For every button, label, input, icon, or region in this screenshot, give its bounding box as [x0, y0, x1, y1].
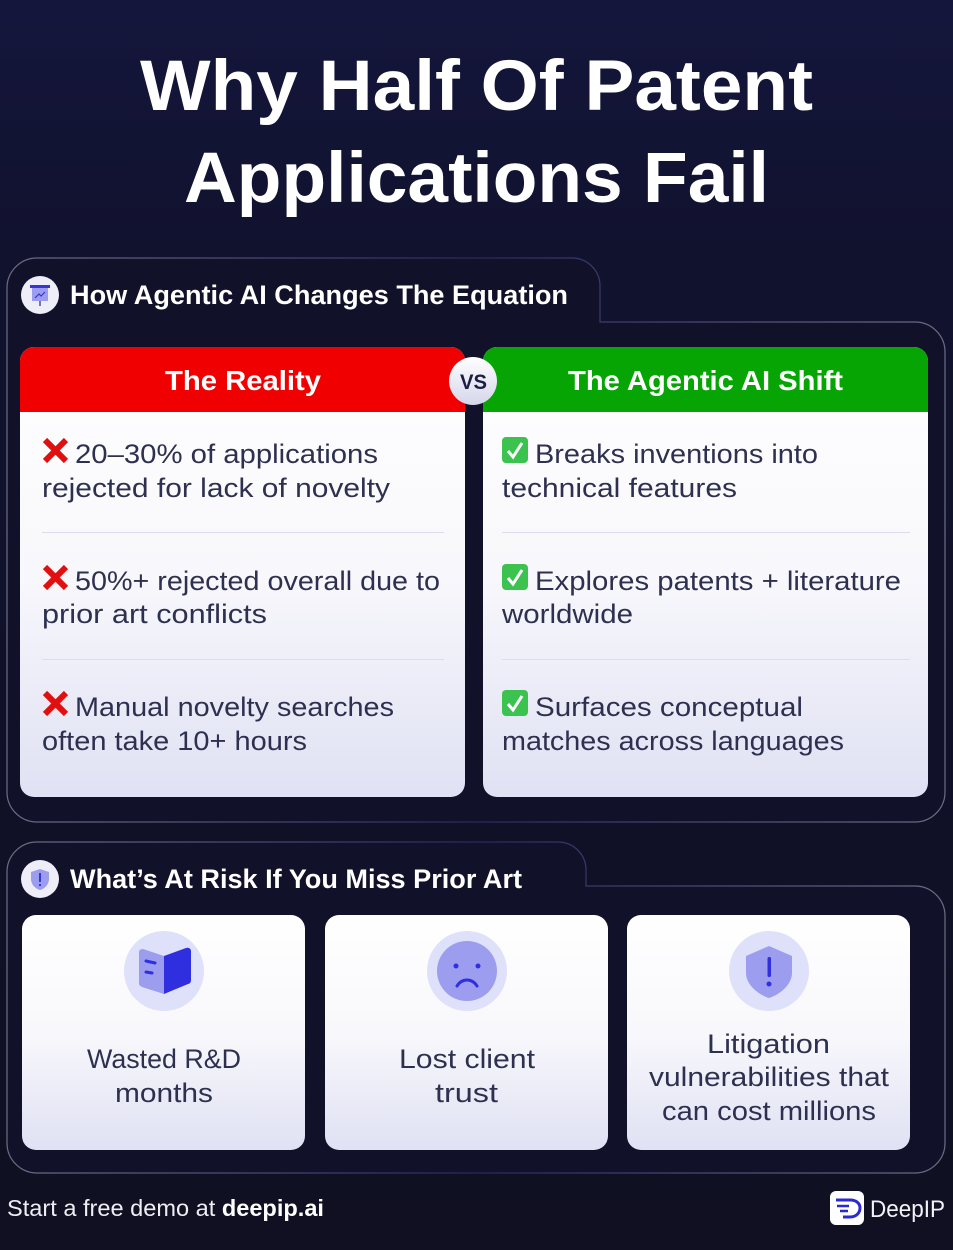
item: patents and literature: [501, 564, 901, 629]
icon: presentation chart: [21, 276, 59, 314]
item: patents and literature: Explores patents + literature: [535, 566, 901, 596]
item: conceptual matches: Surfaces conceptual: [535, 692, 803, 722]
column header: the agentic AI shift: [483, 347, 928, 412]
item: lack of novelty: [42, 439, 391, 503]
item: lack of novelty: rejected for lack of novelty: [42, 473, 391, 503]
icon: open book: [124, 931, 204, 1011]
card text: can cost millions: [662, 1096, 876, 1126]
column: the reality: [20, 347, 465, 797]
icon: sad face: [427, 931, 507, 1011]
card text: Lost client: [399, 1044, 536, 1074]
title: Why Half Of Patent: [140, 47, 813, 126]
item: manual novelty searches: [42, 692, 394, 756]
icon: shield alert: [729, 931, 809, 1011]
item: prior art conflicts: [42, 566, 440, 629]
vs badge: [449, 357, 497, 405]
card text: Litigation: [707, 1029, 830, 1059]
item: technical features: [502, 437, 818, 503]
column header: the reality: [20, 347, 465, 412]
column header: the reality: The Reality: [165, 365, 321, 396]
item: technical features: technical features: [502, 473, 737, 503]
column header: the agentic AI shift: The Agentic AI Shift: [568, 365, 843, 396]
panel heading: What’s At Risk If You Miss Prior Art: [70, 864, 522, 894]
card: litigation vulnerabilities: [627, 915, 910, 1150]
item: prior art conflicts: 50%+ rejected overall due to: [75, 566, 440, 596]
card: lost client trust: [325, 915, 608, 1150]
vs badge: VS: [460, 371, 487, 394]
footer call to action: Start a free demo at deepip.ai: [7, 1195, 324, 1221]
card text: Wasted R&D: [87, 1044, 241, 1074]
card text: trust: [435, 1078, 499, 1108]
panel: how agentic AI changes the equation: [7, 258, 945, 822]
item: patents and literature: worldwide: [501, 599, 633, 629]
item: prior art conflicts: prior art conflicts: [42, 599, 267, 629]
panel heading: How Agentic AI Changes The Equation: [70, 280, 568, 310]
item: manual novelty searches: Manual novelty searches: [75, 692, 394, 722]
item: manual novelty searches: often take 10+ hours: [42, 726, 307, 756]
card text: months: [115, 1078, 213, 1108]
item: conceptual matches: [502, 690, 844, 756]
title: Applications Fail: [184, 139, 769, 218]
item: lack of novelty: 20–30% of applications: [75, 439, 378, 469]
card: wasted R&D: [22, 915, 305, 1150]
card text: [87, 1044, 241, 1108]
card text: [649, 1029, 890, 1126]
logo: DeepIP: [830, 1191, 945, 1225]
column: the agentic AI shift: [483, 347, 928, 797]
panel: what's at risk: [7, 842, 945, 1173]
title: [140, 47, 813, 218]
card text: vulnerabilities that: [649, 1062, 890, 1092]
item: conceptual matches: matches across languages: [502, 726, 844, 756]
item: technical features: Breaks inventions into: [535, 439, 818, 469]
logo: DeepIP: DeepIP: [870, 1196, 945, 1223]
card text: [399, 1044, 536, 1108]
icon: warning shield: [21, 860, 59, 898]
